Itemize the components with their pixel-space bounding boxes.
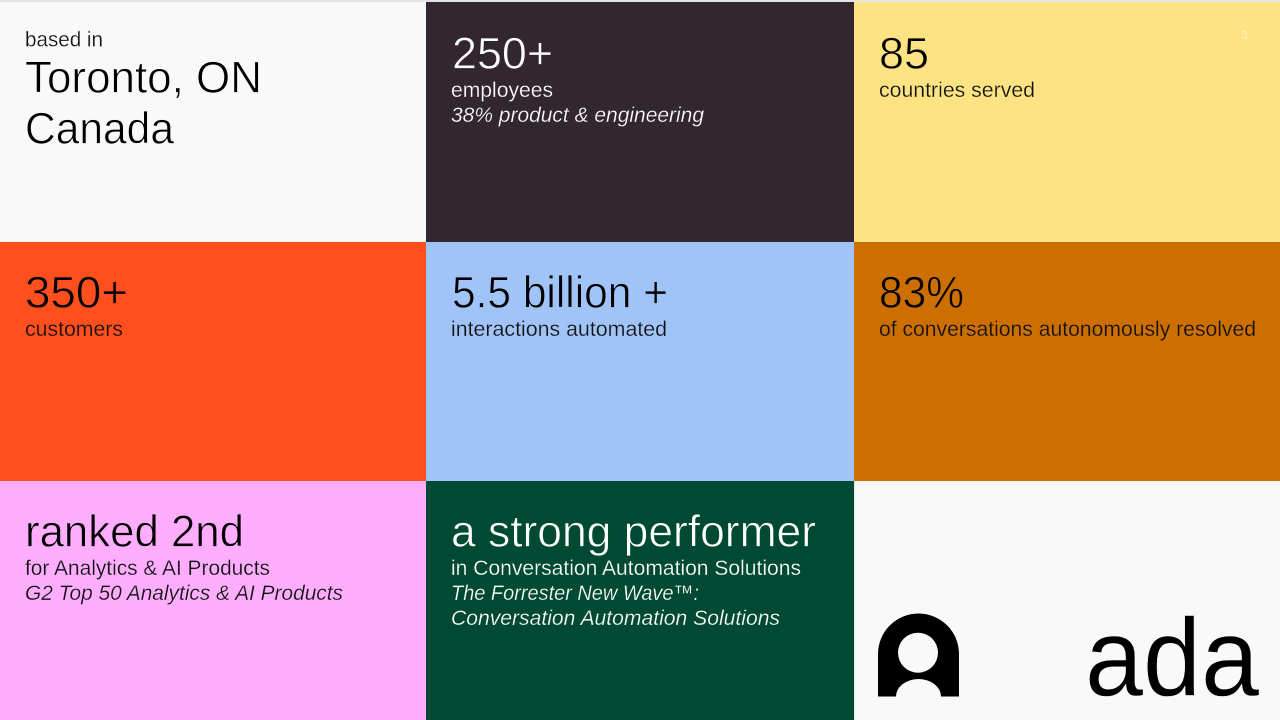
label: customers: customers [25,318,123,341]
note: product and engineering share: 38% product & engineering [451,104,704,127]
wordmark: ada: ada [1085,596,1260,720]
panel: countries [854,2,1280,242]
stat: 83%: 83% [879,268,964,318]
stat: 350+: 350+ [25,268,128,318]
stat: 250+: 250+ [452,30,553,78]
stat: 85: 85 [879,30,929,78]
heading: Canada: Canada [25,104,174,154]
stat: 5.5 billion +: 5.5 billion + [452,268,668,318]
heading: ranked 2nd: ranked 2nd [25,508,244,556]
icon: ada person mark [878,614,959,696]
page number: 3 [1241,28,1248,42]
heading: Toronto, ON: Toronto, ON [25,54,262,102]
label: conversations resolved: of conversations autonomously resolved [879,318,1256,341]
label: countries served: countries served [879,79,1035,102]
note: G2 Top 50: G2 Top 50 Analytics & AI Products [25,582,343,605]
panel: interactions [426,242,854,481]
label: conversation automation solutions: in Conversation Automation Solutions [451,557,801,580]
label: analytics and AI products: for Analytics & AI Products [25,557,270,580]
text: based in: based in [25,28,103,52]
note: Forrester New Wave: The Forrester New Wave™: [451,582,699,605]
panel: resolution rate [854,242,1280,481]
panel: logo [854,481,1280,720]
panel: location [0,2,426,242]
panel: customers [0,242,426,481]
note: report subject: Conversation Automation Solutions [451,607,780,630]
label: employees: employees [451,79,553,102]
panel: employees [426,2,854,242]
panel: G2 ranking [0,481,426,720]
label: interactions automated: interactions automated [451,318,667,341]
panel: Forrester [426,481,854,720]
heading: a strong performer: a strong performer [451,508,816,556]
